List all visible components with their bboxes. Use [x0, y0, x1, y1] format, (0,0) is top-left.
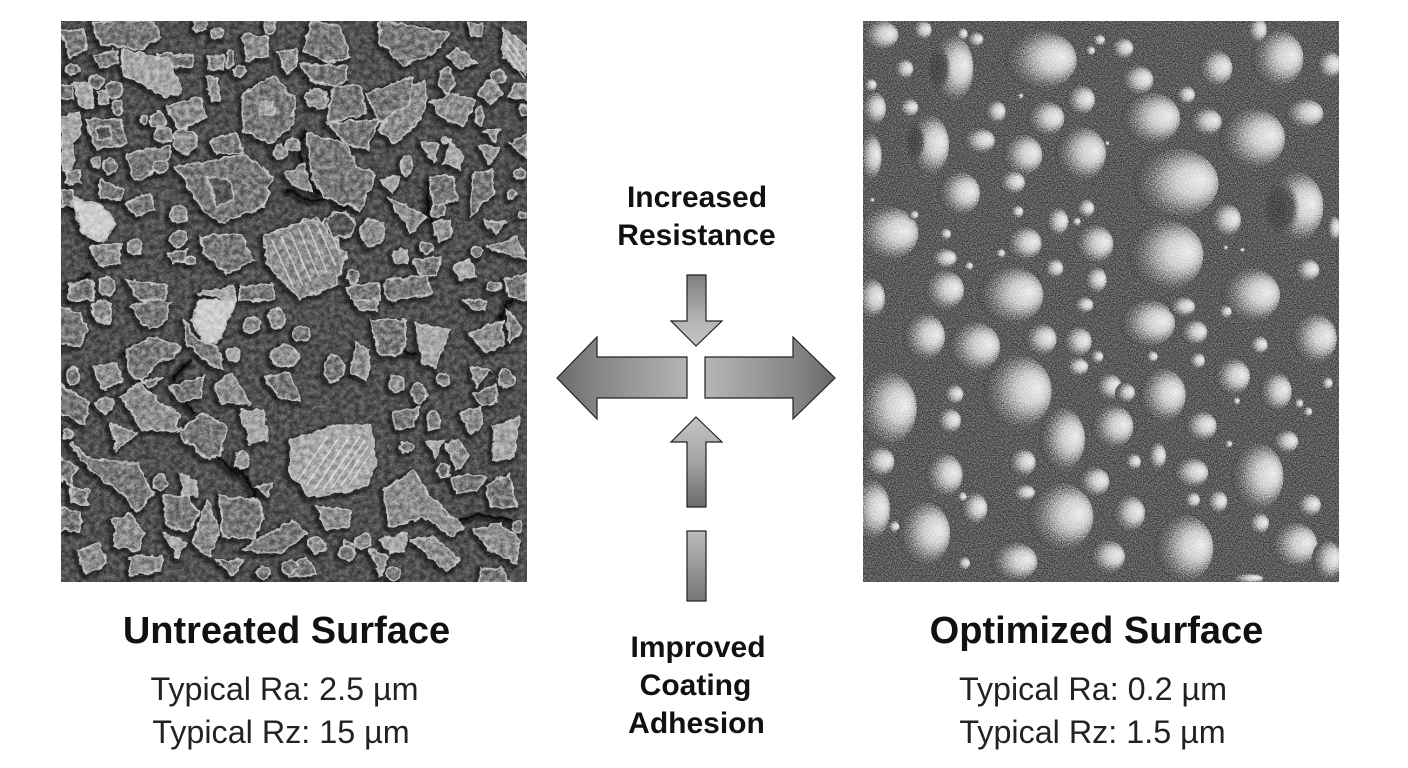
- central arrows: [557, 275, 835, 601]
- arrow: down, increased resistance: [671, 275, 722, 346]
- detached arrow stem: [687, 531, 706, 601]
- micrograph grain: [863, 21, 1339, 582]
- label: improved coating adhesion: [628, 631, 766, 740]
- label: improved coating adhesion: Coating: [640, 669, 751, 702]
- rounded droplet bumps: [850, 17, 1342, 583]
- label: improved coating adhesion: Adhesion: [628, 707, 765, 740]
- rough particle fragments: [60, 20, 527, 583]
- micrograph grain: [61, 21, 527, 582]
- mottled particle texture: [61, 21, 527, 582]
- heading: untreated surface: Untreated Surface: [123, 610, 450, 652]
- label: increased resistance: Increased: [627, 181, 767, 214]
- arrow: right: [705, 337, 835, 419]
- caption: optimized surface: [930, 610, 1263, 750]
- metric: untreated Ra: Typical Ra: 2.5 µm: [150, 671, 419, 707]
- metric: optimized Rz: Typical Rz: 1.5 µm: [959, 714, 1226, 750]
- metric: optimized Ra: Typical Ra: 0.2 µm: [959, 671, 1227, 707]
- label: improved coating adhesion: Improved: [630, 631, 766, 664]
- label: increased resistance: [617, 181, 776, 252]
- caption: untreated surface: [123, 610, 450, 750]
- metric: untreated Rz: Typical Rz: 15 µm: [152, 714, 410, 750]
- arrow: left: [557, 337, 687, 419]
- heading: optimized surface: Optimized Surface: [930, 610, 1263, 652]
- arrow: up, improved coating adhesion: [671, 417, 722, 507]
- panel: untreated surface micrograph: [60, 20, 527, 583]
- panel: optimized surface micrograph: [850, 17, 1342, 583]
- label: increased resistance: Resistance: [617, 219, 776, 252]
- grooved plate stripes: [272, 35, 525, 490]
